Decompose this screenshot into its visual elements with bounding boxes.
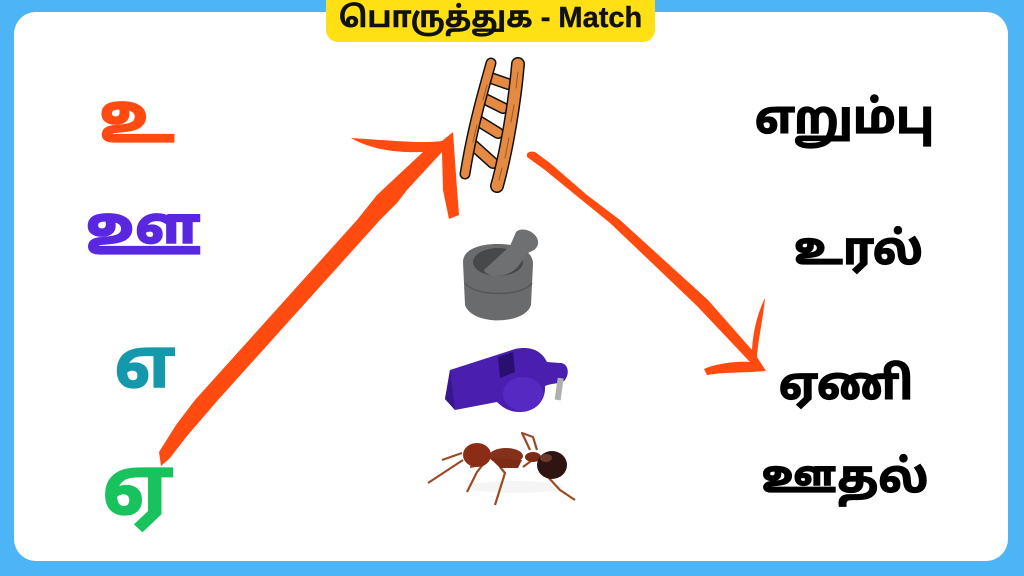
word: ant: எறும்பு [755,91,934,143]
letter: u: உ [99,79,175,157]
title banner: பொருத்துக - Match [339,2,642,34]
letter: e: எ [114,324,176,402]
letter: uu: ஊ [85,191,203,269]
word: mortar: உரல் [794,223,923,274]
letter: ee: ஏ [102,441,174,532]
word: whistle: ஊதல் [762,451,928,502]
word: ladder: ஏணி [779,358,913,409]
